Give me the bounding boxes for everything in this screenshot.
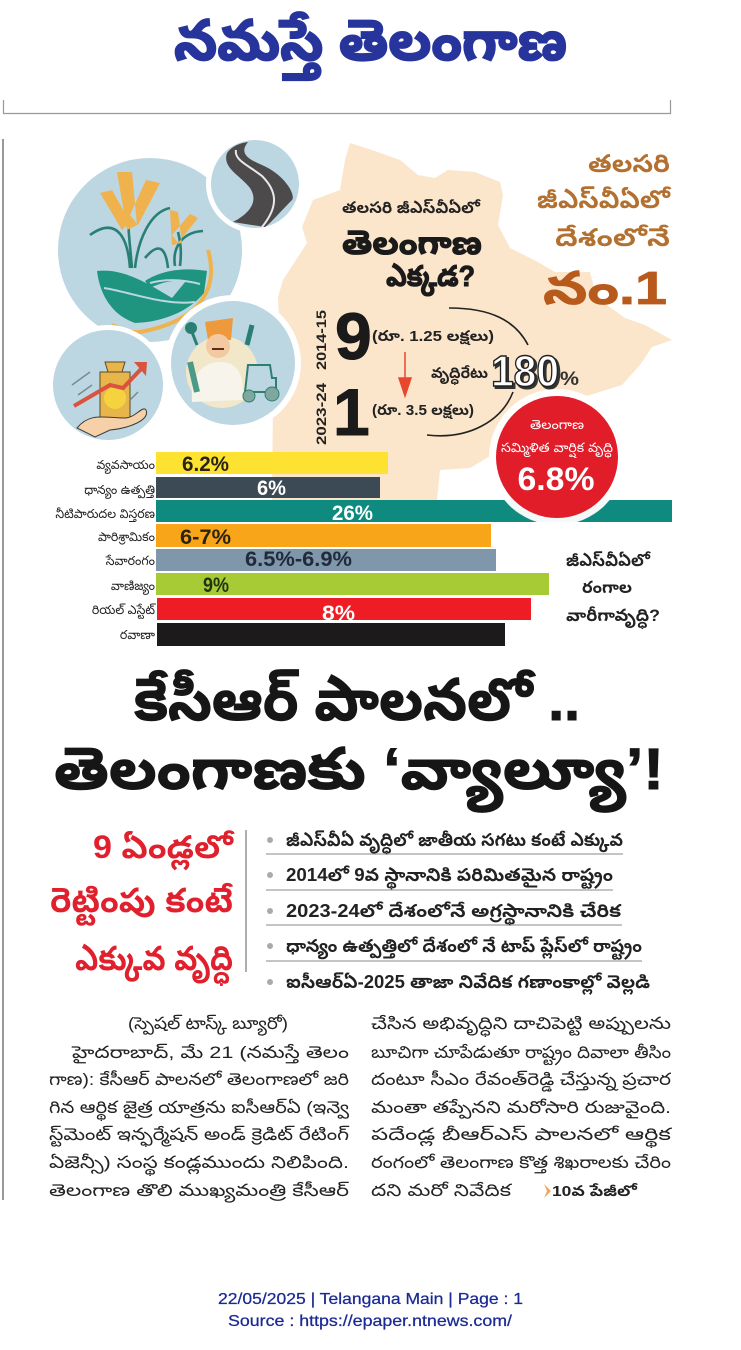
callout: red circle: తెలంగాణ xyxy=(530,417,584,432)
highlights list: ఐసీఆర్‌ఏ-2025 తాజా నివేదిక గణాంకాల్లో వెల్లడి xyxy=(286,972,650,995)
article right column: రంగంలో తెలంగాణ కొత్త శిఖరాలకు చేరిం xyxy=(371,1153,671,1174)
rank numbers: 9 xyxy=(335,299,372,373)
callout: red circle: 6.8% xyxy=(518,461,594,497)
bar chart: 6.5%-6.9% xyxy=(245,548,352,571)
main headline: కేసీఆర్ పాలనలో .. xyxy=(134,668,580,733)
article left column: గాణ): కేసీఆర్ పాలనలో తెలంగాణలో జరి xyxy=(49,1070,349,1089)
growth arcs and 180 percent xyxy=(427,308,579,436)
article right column: మంతా తప్పేనని మరోసారి రుజువైంది. xyxy=(371,1098,671,1119)
callout: red circle: సమ్మిళిత వార్షిక వృద్ధి xyxy=(501,440,613,459)
article right column: బూచిగా చూపేడుతూ రాష్ట్రం దివాలా తీసిం xyxy=(371,1043,671,1066)
bar chart: పారిశ్రామికం xyxy=(98,530,155,545)
growth arcs and 180 percent: 180 xyxy=(493,349,561,398)
rank years: 2014-15 xyxy=(313,310,329,370)
growth arcs and 180 percent: 180 xyxy=(491,347,559,396)
bar chart: వాణిజ్యం xyxy=(111,579,155,595)
bar chart: 6.2% xyxy=(182,453,229,476)
rank numbers: 1 xyxy=(333,375,370,449)
highlights list: 2023-24లో దేశంలోనే అగ్రస్థానానికి చేరిక xyxy=(286,901,621,926)
highlights list xyxy=(266,830,650,995)
rank numbers: (రూ. 3.5 లక్షలు) xyxy=(372,402,474,420)
masthead title: నమస్తే తెలంగాణ xyxy=(174,9,567,81)
rank numbers xyxy=(333,299,494,449)
bar chart xyxy=(55,452,672,646)
red subheading: ఎక్కువ వృద్ధి xyxy=(75,940,233,986)
arrow xyxy=(399,352,411,396)
source footer: 22/05/2025 | Telangana Main | Page : 1 xyxy=(218,1291,523,1308)
heading: number one: జీఎస్‌వీఏలో xyxy=(537,186,671,214)
rank numbers: (రూ. 1.25 లక్షలు) xyxy=(372,328,494,346)
bar chart: రవాణా xyxy=(120,628,155,642)
question heading on map: తలసరి జీఎస్‌వీఏలో xyxy=(342,199,482,217)
question heading on map: తెలంగాణ xyxy=(342,224,482,261)
article right column xyxy=(371,1014,673,1200)
red subheading: 9 ఏండ్లలో xyxy=(93,829,235,871)
article left column: స్ట్‌మెంట్ ఇన్ఫర్మేషన్ అండ్ క్రెడిట్ రేటింగ్ xyxy=(49,1125,350,1147)
article right column: దంటూ సీఎం రేవంత్‌రెడ్డి చేస్తున్న ప్రచార xyxy=(371,1070,672,1092)
highlights list: ధాన్యం ఉత్పత్తిలో దేశంలో నే టాప్ ప్లేస్‌లో రాష్ట్రం xyxy=(286,936,642,961)
bars caption xyxy=(566,551,660,629)
highlights list: 2014లో 9వ స్థానానికి పరిమితమైన రాష్ట్రం xyxy=(286,865,613,890)
article left column: (స్పెషల్ టాస్క్ బ్యూరో) xyxy=(128,1014,288,1036)
heading: number one: నం.1 xyxy=(543,262,667,314)
source footer xyxy=(218,1291,523,1330)
article left column xyxy=(49,1014,350,1203)
bar chart: 26% xyxy=(332,502,373,525)
icon: road circle xyxy=(206,135,304,233)
callout: red circle xyxy=(489,389,625,525)
red subheading: రెట్టింపు కంటే xyxy=(50,882,234,926)
heading: number one xyxy=(537,150,671,314)
map of Telangana xyxy=(272,143,672,500)
article left column: గిన ఆర్థిక జైత్ర యాత్రను ఐసీఆర్‌ఏ (ఇన్వె xyxy=(49,1098,349,1121)
red subheading xyxy=(50,829,235,986)
question heading on map xyxy=(342,199,482,297)
icon: farmer and tractor circle xyxy=(165,295,301,431)
heading: number one: దేశంలోనే xyxy=(555,224,670,252)
rank years: 2023-24 xyxy=(313,383,329,445)
bar chart: 8% xyxy=(322,602,355,625)
main headline xyxy=(54,668,664,813)
icon: money hand circle xyxy=(48,325,168,445)
highlights list: జీఎస్‌వీఏ వృద్ధిలో జాతీయ సగటు కంటే ఎక్కువ xyxy=(286,830,623,855)
bar chart: వ్యవసాయం xyxy=(96,458,155,474)
article right column: చేసిన అభివృద్ధిని దాచిపెట్టి అప్పులను xyxy=(371,1014,671,1037)
bars caption: జీఎస్‌వీఏలో xyxy=(566,551,651,570)
question heading on map: ఎక్కడ? xyxy=(386,261,475,297)
bar chart: సేవారంగం xyxy=(105,554,155,568)
article right column: 10వ పేజీలో xyxy=(552,1183,638,1200)
article left column: ఏజెన్సీ) సంస్థ కండ్లముందు నిలిపింది. xyxy=(49,1153,349,1176)
rank years xyxy=(313,310,329,445)
bar chart: రియల్ ఎస్టేట్ xyxy=(92,603,156,619)
bars caption: రంగాల xyxy=(582,578,632,597)
heading: number one: తలసరి xyxy=(588,150,670,178)
bar chart: 6-7% xyxy=(180,526,231,549)
bar chart: ధాన్యం ఉత్పత్తి xyxy=(84,483,155,499)
source footer: Source : https://epaper.ntnews.com/ xyxy=(228,1313,513,1330)
icon: rice and fields circle xyxy=(58,158,242,342)
growth arcs and 180 percent: వృద్ధిరేటు xyxy=(431,365,488,386)
bars caption: వారీగావృద్ధి? xyxy=(566,606,660,629)
growth arcs and 180 percent: % xyxy=(560,369,579,390)
bar chart: 9% xyxy=(203,574,229,597)
article left column: తెలంగాణ తొలి ముఖ్యమంత్రి కేసీఆర్ xyxy=(49,1181,349,1203)
article left column: హైదరాబాద్, మే 21 (నమస్తే తెలం xyxy=(71,1043,349,1064)
article right column: దని మరో నివేదిక xyxy=(371,1181,512,1200)
article right column: పదేండ్ల బీఆర్‌ఎస్ పాలనలో ఆర్థిక xyxy=(371,1125,673,1148)
main headline: తెలంగాణకు ‘వ్యాల్యూ’! xyxy=(54,737,664,813)
bar chart: 6% xyxy=(257,477,286,500)
bar chart: నీటిపారుదల విస్తరణ xyxy=(55,507,155,522)
